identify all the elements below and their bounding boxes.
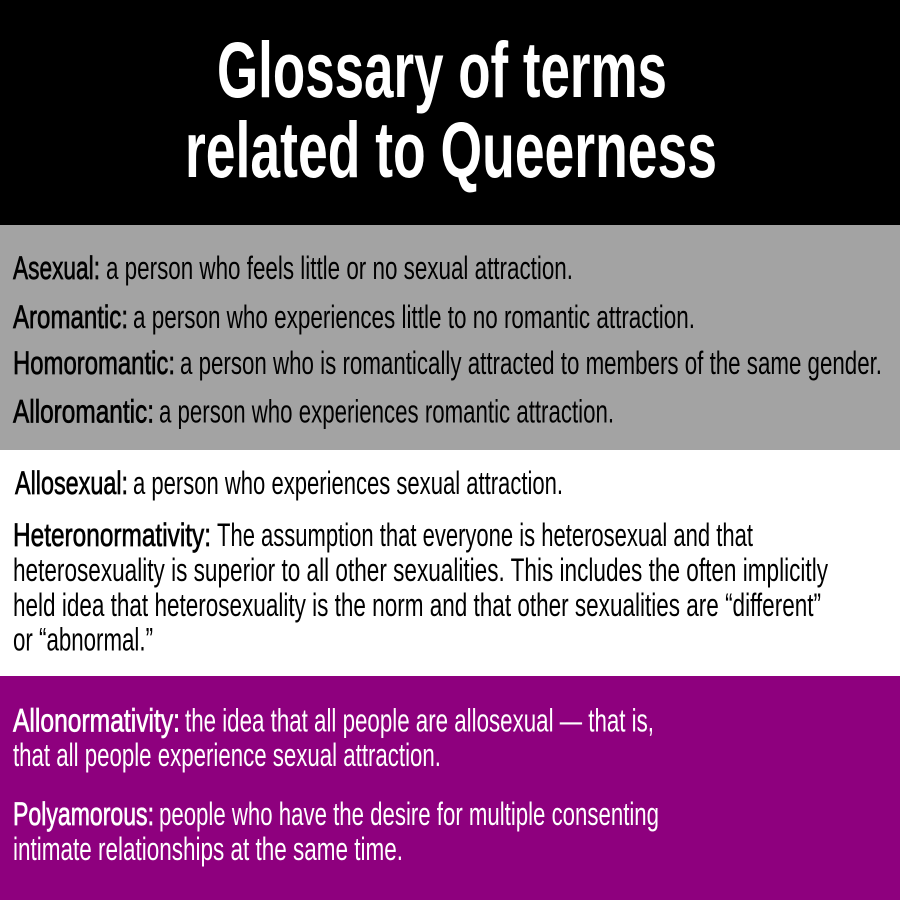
definition: Aromantic: Aromantic: [13,299,128,335]
definition: Asexual: a person who feels little or no sexual attraction. [106,250,573,286]
definition: Polyamorous: people who have the desire for multiple consenting [159,796,659,832]
definition: Allosexual [15,465,563,501]
definition: Heteronormativity [13,517,829,658]
definition: Heteronormativity: or “abnormal.” [13,622,153,658]
title: Glossary of terms [217,25,667,114]
definition: Alloromantic [13,394,614,430]
definition: Polyamorous [13,796,659,867]
definition: Aromantic [13,299,695,335]
panel: grey definitions [0,225,900,450]
definition: Allosexual: a person who experiences sexual attraction. [133,465,563,501]
definition: Asexual [13,250,573,286]
panel: purple definitions [0,676,900,900]
definition: Allonormativity: Allonormativity: [13,702,180,738]
definition: Alloromantic: Alloromantic: [13,394,154,430]
definition: Asexual: Asexual: [13,250,100,286]
definition: Allonormativity: that all people experience sexual attraction. [13,737,441,773]
definition: Allonormativity [13,702,654,773]
definition: Polyamorous: Polyamorous: [13,796,154,832]
definition: Heteronormativity: Heteronormativity: [13,517,211,553]
definition: Alloromantic: a person who experiences romantic attraction. [159,394,614,430]
definition: Homoromantic: Homoromantic: [13,345,175,381]
panel: title banner [0,0,900,225]
definition: Polyamorous: intimate relationships at the same time. [13,831,403,867]
definition: Allonormativity: the idea that all people are allosexual — that is, [185,702,654,738]
title [185,25,717,194]
definition: Allosexual: Allosexual: [15,465,128,501]
panel: white definitions [0,450,900,676]
